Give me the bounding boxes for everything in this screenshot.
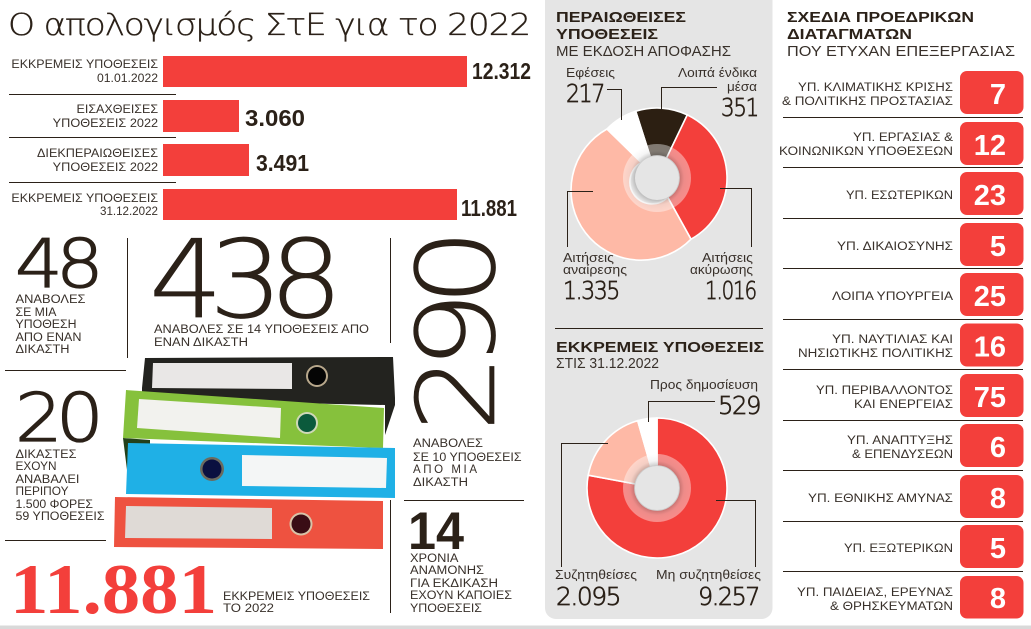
- row: shipping 16: ΝΗΣΙΩΤΙΚΗΣ ΠΟΛΙΤΙΚΗΣ: [798, 348, 953, 360]
- title: Ο απολογισμός ΣτΕ για το 2022: [8, 8, 530, 43]
- heading: decrees: [787, 9, 1015, 60]
- stat: 290 rotated: ΑΠΟ ΜΙΑ: [413, 464, 477, 476]
- callout: annulment 1.016: 1.016: [705, 276, 756, 305]
- row: education 8: & ΘΡΗΣΚΕΥΜΑΤΩΝ: [830, 601, 953, 613]
- row: development 6: ΥΠ. ΑΝΑΠΤΥΞΗΣ: [847, 435, 953, 447]
- stat: 14: [408, 502, 512, 615]
- stat: 48: ΑΠΟ ΕΝΑΝ: [16, 332, 82, 344]
- callout: annulment 1.016: ακύρωσης: [690, 262, 753, 277]
- illustration: stack of binders: [114, 357, 395, 549]
- heading: decrees: ΣΧΕΔΙΑ ΠΡΟΕΔΡΙΚΩΝ: [787, 9, 974, 26]
- stat: 48: 48: [15, 225, 97, 303]
- row: shipping 16: [798, 324, 1024, 366]
- bar: pending 01.01.2022: 12.312: [472, 58, 531, 84]
- bar: pending 31.12.2022: [11, 189, 517, 221]
- row: foreign affairs 5: [844, 525, 1024, 568]
- stat: 11.881: ΕΚΚΡΕΜΕΙΣ ΥΠΟΘΕΣΕΙΣ: [223, 591, 370, 603]
- row: justice 5: 5: [990, 231, 1006, 263]
- row: other ministries 25: [832, 273, 1024, 316]
- stat: 11.881: 11.881: [10, 551, 217, 629]
- row: development 6: [847, 424, 1024, 467]
- row: foreign affairs 5: 5: [990, 533, 1006, 565]
- row: labour 12: ΥΠ. ΕΡΓΑΣΙΑΣ &: [853, 132, 953, 144]
- stat: 290 rotated: ΔΙΚΑΣΤΗ: [413, 477, 468, 489]
- callout: cassation 1.335: 1.335: [563, 276, 619, 305]
- bar: pending 31.12.2022: 31.12.2022: [100, 206, 158, 218]
- bar: incoming 2022: ΕΙΣΑΧΘΕΙΣΕΣ: [76, 104, 158, 116]
- heading: pending cases: [556, 339, 764, 372]
- row: labour 12: [779, 122, 1024, 165]
- row: climate crisis 7: [782, 71, 1024, 114]
- row: defence 8: 8: [990, 483, 1006, 515]
- bar: completed 2022: [37, 144, 309, 176]
- heading: completed cases: ΠΕΡΑΙΩΘΕΙΣΕΣ: [556, 9, 686, 26]
- row: environment 75: ΚΑΙ ΕΝΕΡΓΕΙΑΣ: [854, 399, 953, 411]
- bar: incoming 2022: ΥΠΟΘΕΣΕΙΣ 2022: [53, 118, 158, 130]
- stat: 11.881: [10, 551, 370, 629]
- heading: completed cases: ΥΠΟΘΕΣΕΙΣ: [556, 26, 658, 43]
- bar: completed 2022: 3.491: [256, 150, 309, 176]
- row: education 8: ΥΠ. ΠΑΙΔΕΙΑΣ, ΕΡΕΥΝΑΣ: [797, 587, 953, 599]
- bar: pending 01.01.2022: ΕΚΚΡΕΜΕΙΣ ΥΠΟΘΕΣΕΙΣ: [11, 59, 158, 71]
- bar: incoming 2022: 3.060: [245, 105, 305, 131]
- row: defence 8: ΥΠ. ΕΘΝΙΚΗΣ ΑΜΥΝΑΣ: [808, 493, 953, 505]
- callout: other remedies 351: [662, 65, 758, 122]
- donut chart: pending cases: [587, 418, 727, 558]
- callout: cassation 1.335: αναίρεσης: [563, 262, 627, 277]
- row: interior 23: ΥΠ. ΕΣΩΤΕΡΙΚΩΝ: [846, 190, 953, 202]
- stat: 14: ΥΠΟΘΕΣΕΙΣ: [410, 603, 482, 615]
- stat: 438: 438: [149, 218, 333, 343]
- heading: pending cases: ΕΚΚΡΕΜΕΙΣ ΥΠΟΘΕΣΕΙΣ: [556, 339, 764, 356]
- stat: 48: [15, 225, 97, 356]
- callout: not discussed 9.257: 9.257: [698, 582, 759, 611]
- row: education 8: [797, 576, 1024, 618]
- stat: 20: 59 ΥΠΟΘΕΣΕΙΣ: [16, 511, 104, 523]
- row: interior 23: [846, 172, 1024, 215]
- stat: 14: ΕΧΟΥΝ ΚΑΠΟΙΕΣ: [410, 590, 512, 602]
- panel: draft presidential decrees: [779, 9, 1024, 618]
- stat: 11.881: ΤΟ 2022: [223, 603, 274, 615]
- callout: not discussed 9.257: Μη συζητηθείσες: [656, 567, 761, 582]
- row: other ministries 25: 25: [974, 281, 1006, 313]
- stat: 20: 20: [15, 379, 97, 457]
- bar: completed 2022: ΥΠΟΘΕΣΕΙΣ 2022: [53, 162, 158, 174]
- row: other ministries 25: ΛΟΙΠΑ ΥΠΟΥΡΓΕΙΑ: [832, 291, 953, 303]
- row: interior 23: 23: [974, 180, 1006, 212]
- green binder: [123, 390, 384, 448]
- stat: 20: ΠΕΡΙΠΟΥ: [16, 486, 69, 498]
- stat: 20: 1.500 ΦΟΡΕΣ: [16, 499, 93, 511]
- callout: cassation 1.335: Αιτήσεις: [563, 250, 614, 265]
- callout: for publication 529: Προς δημοσίευση: [650, 377, 758, 392]
- stat: 20: [15, 379, 104, 523]
- callout: other remedies 351: μέσα: [727, 79, 758, 94]
- heading: decrees: ΔΙΑΤΑΓΜΑΤΩΝ: [787, 26, 912, 43]
- callout: not discussed 9.257: [656, 500, 761, 611]
- callout: appeals 217: 217: [566, 79, 604, 108]
- stat: 48: ΑΝΑΒΟΛΕΣ: [16, 294, 86, 306]
- bar: pending 01.01.2022: [11, 56, 531, 87]
- panel: grey donut charts: [545, 0, 772, 619]
- red binder: [114, 497, 383, 549]
- heading: completed cases: ΜΕ ΕΚΔΟΣΗ ΑΠΟΦΑΣΗΣ: [556, 43, 731, 60]
- row: development 6: 6: [990, 432, 1006, 464]
- callout: for publication 529: 529: [718, 391, 760, 420]
- stat: 290 rotated: [395, 239, 522, 489]
- row: environment 75: 75: [974, 382, 1006, 414]
- callout: for publication 529: [648, 377, 760, 422]
- row: development 6: & ΕΠΕΝΔΥΣΕΩΝ: [852, 449, 953, 461]
- stat: 14: 14: [408, 502, 464, 561]
- stat: 14: ΑΝΑΜΟΝΗΣ: [410, 565, 484, 577]
- callout: annulment 1.016: Αιτήσεις: [702, 250, 753, 265]
- row: justice 5: [837, 223, 1024, 266]
- callout: other remedies 351: 351: [721, 93, 758, 122]
- stat: 20: ΔΙΚΑΣΤΕΣ: [16, 449, 76, 461]
- stat: 48: ΔΙΚΑΣΤΗ: [16, 344, 70, 356]
- callout: cassation 1.335: [563, 192, 627, 305]
- callout: annulment 1.016: [690, 188, 756, 305]
- black binder: [142, 357, 395, 435]
- bar: pending 31.12.2022: ΕΚΚΡΕΜΕΙΣ ΥΠΟΘΕΣΕΙΣ: [11, 193, 158, 205]
- row: climate crisis 7: 7: [990, 79, 1006, 111]
- stat: 438: ΑΝΑΒΟΛΕΣ ΣΕ 14 ΥΠΟΘΕΣΕΙΣ ΑΠΟ: [154, 324, 369, 336]
- bar chart: cases: [9, 56, 531, 221]
- row: climate crisis 7: ΥΠ. ΚΛΙΜΑΤΙΚΗΣ ΚΡΙΣΗΣ: [798, 82, 953, 94]
- stat: 20: ΕΧΟΥΝ: [16, 461, 56, 473]
- stat: 14: ΓΙΑ ΕΚΔΙΚΑΣΗ: [410, 578, 498, 590]
- stat: 290 rotated: ΑΝΑΒΟΛΕΣ: [413, 438, 483, 450]
- row: environment 75: [816, 374, 1024, 417]
- stat: 20: ΑΝΑΒΑΛΕΙ: [16, 474, 80, 486]
- callout: discussed 2.095: [555, 444, 637, 611]
- stat: 48: ΣΕ ΜΙΑ: [16, 307, 57, 319]
- callout: discussed 2.095: Συζητηθείσες: [555, 567, 637, 582]
- callout: other remedies 351: Λοιπά ένδικα: [678, 65, 758, 80]
- row: labour 12: ΚΟΙΝΩΝΙΚΩΝ ΥΠΟΘΕΣΕΩΝ: [779, 146, 953, 158]
- row: environment 75: ΥΠ. ΠΕΡΙΒΑΛΛΟΝΤΟΣ: [816, 385, 953, 397]
- stat: 438: ΕΝΑΝ ΔΙΚΑΣΤΗ: [154, 337, 248, 349]
- donut chart: completed cases: [571, 108, 727, 260]
- row: education 8: 8: [990, 583, 1006, 615]
- heading: decrees: ΠΟΥ ΕΤΥΧΑΝ ΕΠΕΞΕΡΓΑΣΙΑΣ: [787, 43, 1015, 60]
- row: labour 12: 12: [974, 130, 1006, 162]
- callout: appeals 217: Εφέσεις: [566, 65, 615, 80]
- stat: 14: ΧΡΟΝΙΑ: [410, 553, 459, 565]
- bar: incoming 2022: [53, 100, 305, 132]
- bar: pending 01.01.2022: 01.01.2022: [97, 73, 158, 85]
- heading: pending cases: ΣΤΙΣ 31.12.2022: [556, 355, 659, 372]
- stat: 48: ΥΠΟΘΕΣΗ: [16, 319, 76, 331]
- row: shipping 16: ΥΠ. ΝΑΥΤΙΛΙΑΣ ΚΑΙ: [832, 334, 953, 346]
- row: foreign affairs 5: ΥΠ. ΕΞΩΤΕΡΙΚΩΝ: [844, 543, 953, 555]
- callout: appeals 217: [566, 65, 622, 120]
- bar: completed 2022: ΔΙΕΚΠΕΡΑΙΩΘΕΙΣΕΣ: [37, 148, 158, 160]
- row: defence 8: [808, 475, 1024, 518]
- row: climate crisis 7: & ΠΟΛΙΤΙΚΗΣ ΠΡΟΣΤΑΣΙΑΣ: [782, 96, 953, 108]
- heading: completed cases: [556, 9, 731, 60]
- bar: pending 31.12.2022: 11.881: [461, 195, 517, 221]
- blue binder: [126, 443, 395, 498]
- stat: 290 rotated: 290: [395, 239, 520, 432]
- row: justice 5: ΥΠ. ΔΙΚΑΙΟΣΥΝΗΣ: [837, 241, 953, 253]
- stat: 290 rotated: ΣΕ 10 ΥΠΟΘΕΣΕΙΣ: [413, 452, 522, 464]
- row: shipping 16: 16: [974, 332, 1006, 364]
- callout: discussed 2.095: 2.095: [556, 582, 620, 611]
